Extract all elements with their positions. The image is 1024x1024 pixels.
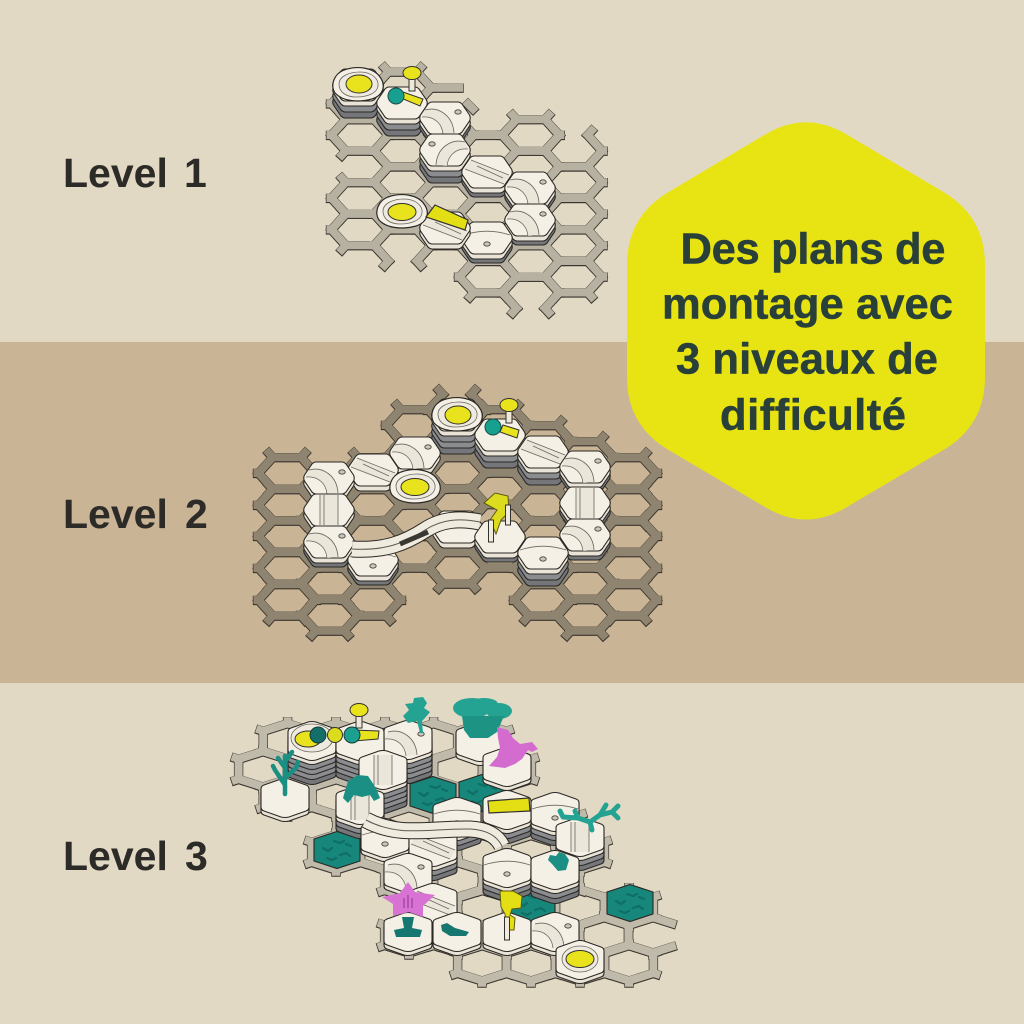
teal terrain tiles [314,774,653,924]
yellow bar [426,205,468,230]
yellow pin [350,704,368,728]
teal creature [343,775,380,803]
track tiles [333,68,555,263]
illustration: level 1 marble track [330,66,603,313]
yellow bar [488,798,530,813]
illustration: level 2 marble track [258,390,658,636]
yellow pin [403,66,421,91]
teal leaf plant [403,697,430,733]
track tiles front rows [384,848,604,984]
heading: Level 3: Level [63,833,168,879]
teal spray plant [560,805,618,830]
background: middle band [0,342,1024,683]
purple flower [382,882,435,937]
purple bird [489,727,538,768]
teal tree [453,698,512,738]
teal marble and yellow lever [485,419,519,438]
badge text: montage avec [662,280,953,328]
track tiles back row [261,720,604,880]
heading: Level 3: 3 [185,833,208,879]
teal small creature [548,852,569,871]
marbles and lever [310,727,379,743]
badge text: 3 niveaux de [676,336,938,384]
hexagonal base plate [258,390,658,636]
track tiles [304,398,610,586]
long ramp [352,520,480,549]
heading: Level 1: Level [63,150,168,196]
badge text: difficulté [720,392,906,440]
background: top band [0,0,1024,342]
yellow switch on post [500,891,522,940]
heading: Level 2: 2 [185,491,208,537]
badge text: Des plans de [680,226,946,274]
teal coral plant left [273,752,298,794]
curved bridge ramp [366,820,502,846]
heading: Level 2: Level [63,491,168,537]
illustration: level 3 marble track [236,697,672,984]
badge shape [627,122,985,520]
background: bottom band [0,683,1024,1024]
hexagonal base plate [236,721,672,983]
hexagonal base plate [330,67,603,313]
teal marble and yellow lever [388,88,423,106]
yellow pin [500,398,518,423]
yellow switch on posts [484,493,510,542]
badge text [662,226,953,440]
heading: Level 1: 1 [184,150,207,196]
teal fish shape [441,923,469,936]
badge: yellow hexagon callout [627,122,985,520]
